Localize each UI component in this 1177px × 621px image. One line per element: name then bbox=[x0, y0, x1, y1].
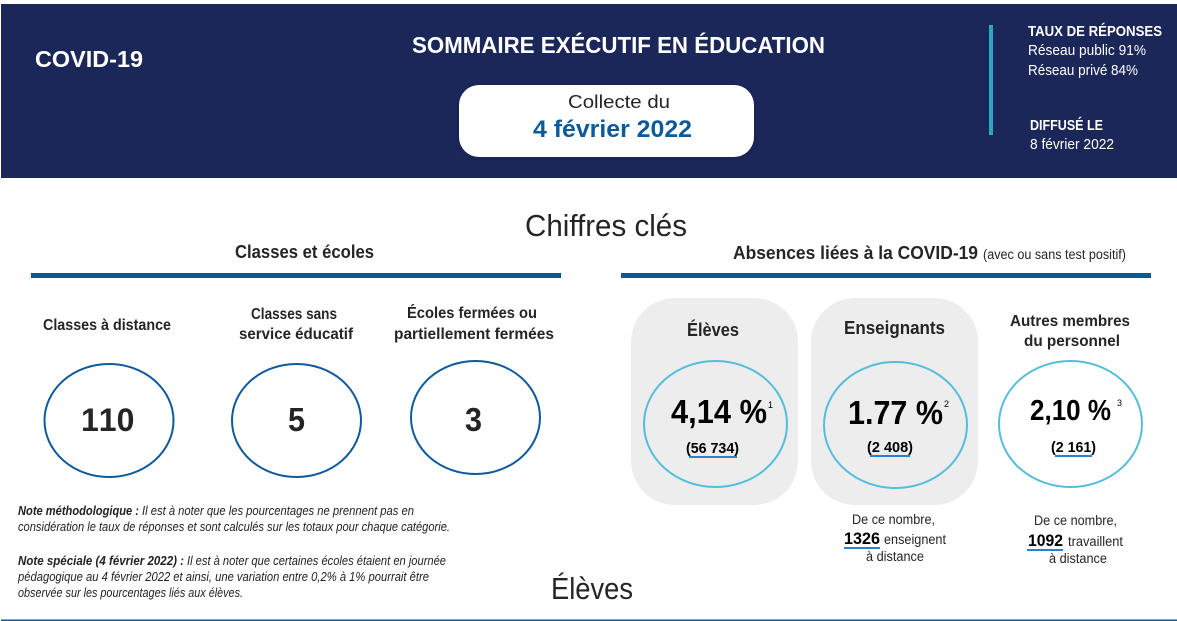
remote teaching note: 1326 bbox=[844, 530, 880, 548]
methodological note: considération le taux de réponses et sont calculés sur les totaux pour chaque catégorie. bbox=[18, 520, 450, 534]
metric: classes à distance: 110 bbox=[81, 402, 134, 438]
panel: absences bbox=[621, 242, 1151, 566]
metric: classes sans service éducatif: Classes sans bbox=[251, 306, 337, 323]
panel heading: (avec ou sans test positif) bbox=[983, 247, 1126, 262]
metric: élèves: 1 bbox=[768, 400, 773, 410]
metric: élèves: Élèves bbox=[687, 319, 739, 340]
response rates: TAUX DE RÉPONSES bbox=[1028, 23, 1162, 40]
heading: Chiffres clés: Chiffres clés bbox=[525, 208, 687, 243]
metric: écoles fermées bbox=[394, 305, 554, 474]
main title: SOMMAIRE EXÉCUTIF EN ÉDUCATION bbox=[412, 31, 825, 58]
panel heading: Classes et écoles bbox=[235, 241, 374, 262]
remote work note: à distance bbox=[1049, 551, 1107, 566]
release date: DIFFUSÉ LE bbox=[1030, 117, 1103, 134]
metric: classes à distance: Classes à distance bbox=[43, 317, 171, 334]
special note: observée sur les pourcentages liés aux élèves. bbox=[18, 586, 243, 600]
remote work note bbox=[1027, 513, 1123, 566]
remote work note: De ce nombre, bbox=[1034, 513, 1117, 528]
collection date card bbox=[456, 84, 757, 161]
metric: enseignants: (2 408) bbox=[867, 440, 913, 456]
metric: élèves: (56 734) bbox=[686, 441, 739, 457]
special note: Il est à noter que certaines écoles étaient en journée bbox=[187, 554, 446, 568]
response rates: Réseau public 91% bbox=[1028, 43, 1146, 59]
heading: Élèves: Élèves bbox=[551, 571, 633, 606]
header banner bbox=[1, 4, 1177, 178]
remote work note: travaillent bbox=[1068, 534, 1123, 549]
release date: 8 février 2022 bbox=[1030, 137, 1114, 153]
remote teaching note: De ce nombre, bbox=[852, 512, 935, 527]
metric: élèves: 4,14 % bbox=[671, 393, 767, 430]
metric: autres membres du personnel: du personnel bbox=[1024, 333, 1120, 350]
divider bar bbox=[989, 25, 993, 135]
metric: autres membres du personnel bbox=[999, 313, 1142, 566]
panel heading: Absences liées à la COVID-19 bbox=[733, 242, 978, 263]
metric: autres membres du personnel: 3 bbox=[1117, 398, 1122, 408]
metric: classes sans service éducatif bbox=[232, 306, 361, 477]
metric: autres membres du personnel: 2,10 % bbox=[1030, 395, 1111, 427]
metric: autres membres du personnel: Autres membres bbox=[1010, 313, 1130, 330]
metric: enseignants: 2 bbox=[944, 399, 949, 409]
special note: pédagogique au 4 février 2022 et ainsi, une variation entre 0,2% à 1% pourrait être bbox=[17, 570, 429, 584]
methodological note: Il est à noter que les pourcentages ne prennent pas en bbox=[142, 504, 414, 518]
remote teaching note bbox=[844, 512, 946, 564]
remote teaching note: à distance bbox=[866, 549, 924, 564]
metric: écoles fermées: 3 bbox=[465, 401, 482, 438]
panel heading bbox=[733, 242, 1126, 263]
methodological note bbox=[18, 504, 450, 534]
metric: classes sans service éducatif: 5 bbox=[288, 401, 305, 438]
metric: enseignants bbox=[811, 298, 978, 564]
metric: autres membres du personnel: (2 161) bbox=[1051, 440, 1096, 456]
release date bbox=[1030, 117, 1114, 153]
panel: classes et écoles bbox=[31, 241, 561, 477]
metric: classes sans service éducatif: service éducatif bbox=[239, 326, 354, 343]
metric: écoles fermées: Écoles fermées ou bbox=[407, 305, 537, 322]
response rates: Réseau privé 84% bbox=[1028, 63, 1138, 79]
remote teaching note: enseignent bbox=[884, 532, 946, 547]
collection date card: Collecte du bbox=[568, 92, 670, 112]
special note bbox=[17, 554, 446, 600]
program label: COVID-19 bbox=[35, 46, 143, 72]
metric: enseignants: Enseignants bbox=[844, 318, 945, 338]
metric: classes à distance bbox=[43, 317, 174, 477]
metric: enseignants: 1.77 % bbox=[848, 394, 943, 431]
special note: Note spéciale (4 février 2022) : bbox=[18, 554, 184, 568]
metric: élèves bbox=[631, 298, 798, 505]
methodological note: Note méthodologique : bbox=[18, 504, 139, 518]
remote work note: 1092 bbox=[1028, 532, 1063, 550]
response rates bbox=[1028, 23, 1162, 79]
metric: écoles fermées: partiellement fermées bbox=[394, 326, 554, 343]
collection date card: 4 février 2022 bbox=[533, 116, 692, 143]
